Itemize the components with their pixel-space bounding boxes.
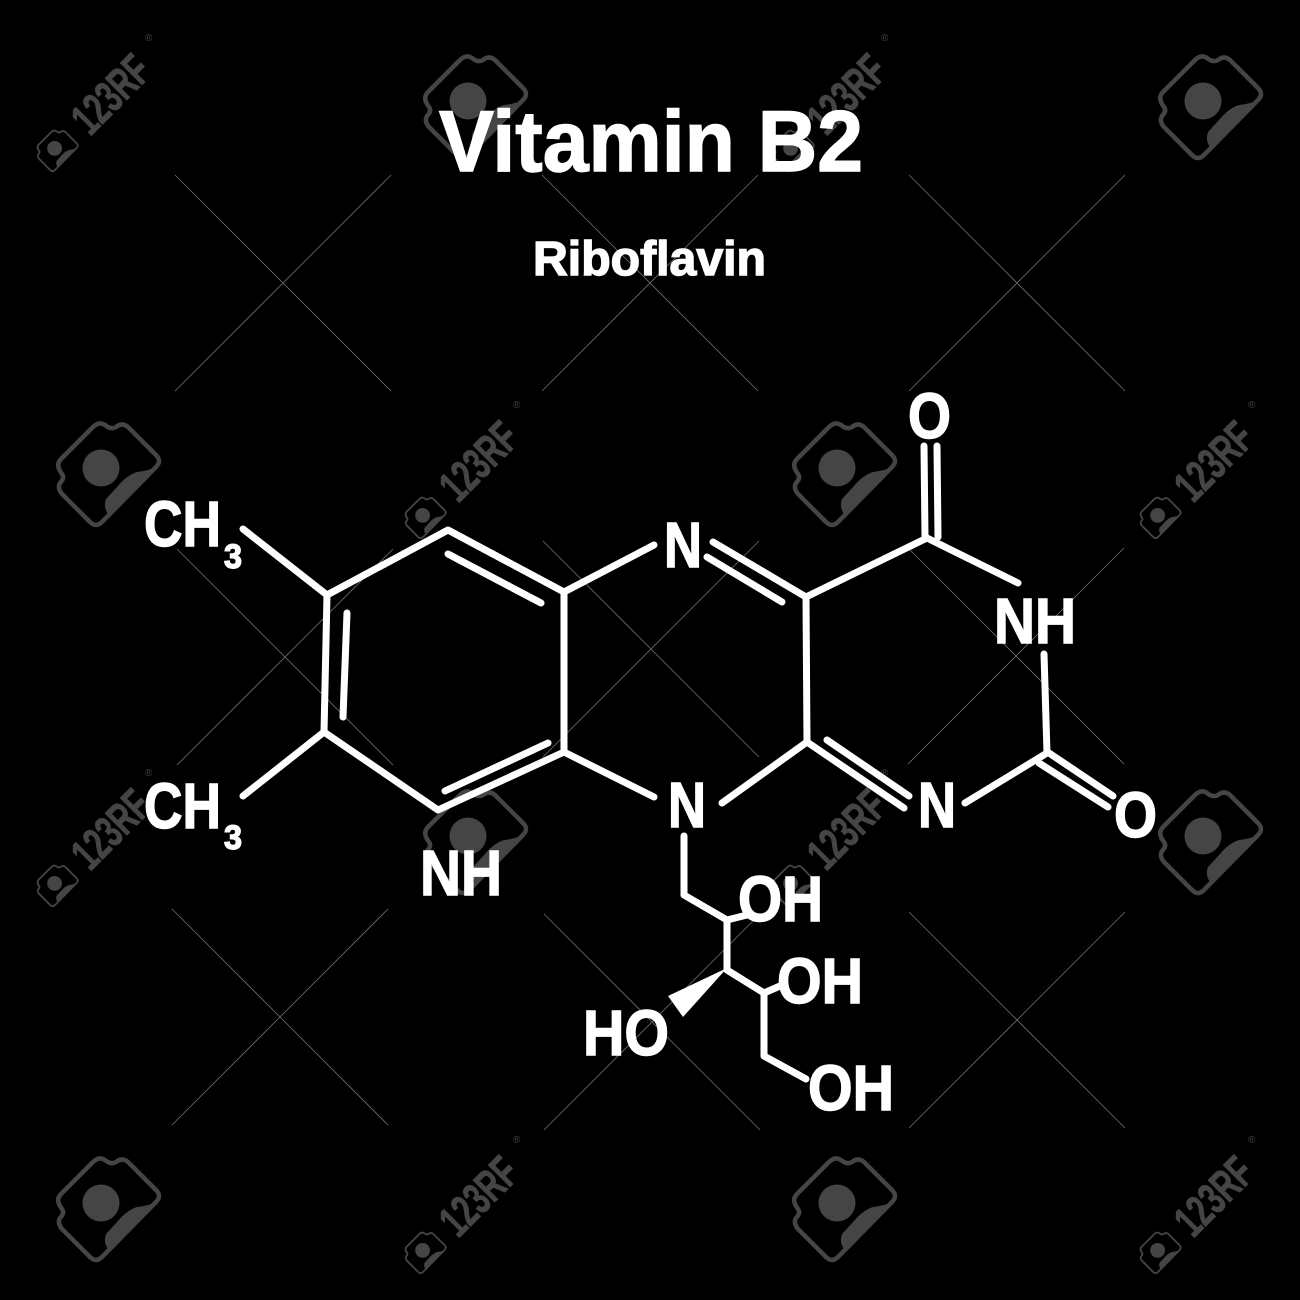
label: upper CH3: CH — [144, 488, 221, 560]
label: lower CH3: CH — [144, 770, 221, 842]
watermark: small 123RF logos: 123RF — [429, 1146, 529, 1246]
label: right NH: NH — [994, 585, 1076, 657]
label: right O: O — [1114, 779, 1157, 851]
watermark: small 123RF logos: ® — [513, 1135, 521, 1146]
watermark: small 123RF logos: ® — [145, 768, 153, 779]
label: bottom OH: OH — [808, 1052, 894, 1124]
watermark: small 123RF logos: 123RF — [429, 411, 529, 511]
central and right ring bonds — [564, 446, 1113, 808]
label: lower N: N — [668, 769, 706, 841]
label: first OH: OH — [738, 863, 823, 935]
watermark: small 123RF logos: 123RF — [797, 779, 897, 879]
watermark: small 123RF logos: 123RF — [1164, 1146, 1264, 1246]
ribityl side chain bonds — [684, 836, 806, 1079]
watermark: small 123RF logos: ® — [145, 33, 153, 44]
watermark: crossing lines — [172, 175, 1125, 1130]
watermark: small 123RF logos: 123RF — [1164, 411, 1264, 511]
watermark: small 123RF logos: ® — [1248, 400, 1256, 411]
watermark: small 123RF logos: ® — [1248, 1135, 1256, 1146]
label: second OH: OH — [777, 945, 863, 1017]
molecule: riboflavin structural formula — [144, 380, 1157, 1124]
label: lower CH3: 3 — [224, 819, 242, 857]
subtitle: Riboflavin — [533, 233, 766, 286]
watermark: small 123RF logos: ® — [513, 400, 521, 411]
watermark: small 123RF logos: ® — [881, 768, 889, 779]
label: top O: O — [908, 380, 951, 452]
watermark: small 123RF logos: 123RF — [797, 44, 897, 144]
label: top N: N — [664, 509, 702, 581]
label: upper CH3: 3 — [224, 538, 242, 576]
watermark: small 123RF logos: 123RF — [61, 44, 161, 144]
watermark: small 123RF logos: 123RF — [61, 779, 161, 879]
left benzene ring bonds — [243, 529, 564, 810]
label: right N: N — [918, 769, 956, 841]
title: Vitamin B2 — [439, 94, 863, 190]
label: HO: HO — [583, 997, 669, 1069]
label: ring NH: NH — [420, 837, 502, 909]
watermark: small 123RF logos: ® — [881, 33, 889, 44]
wedge bond — [668, 968, 727, 1017]
